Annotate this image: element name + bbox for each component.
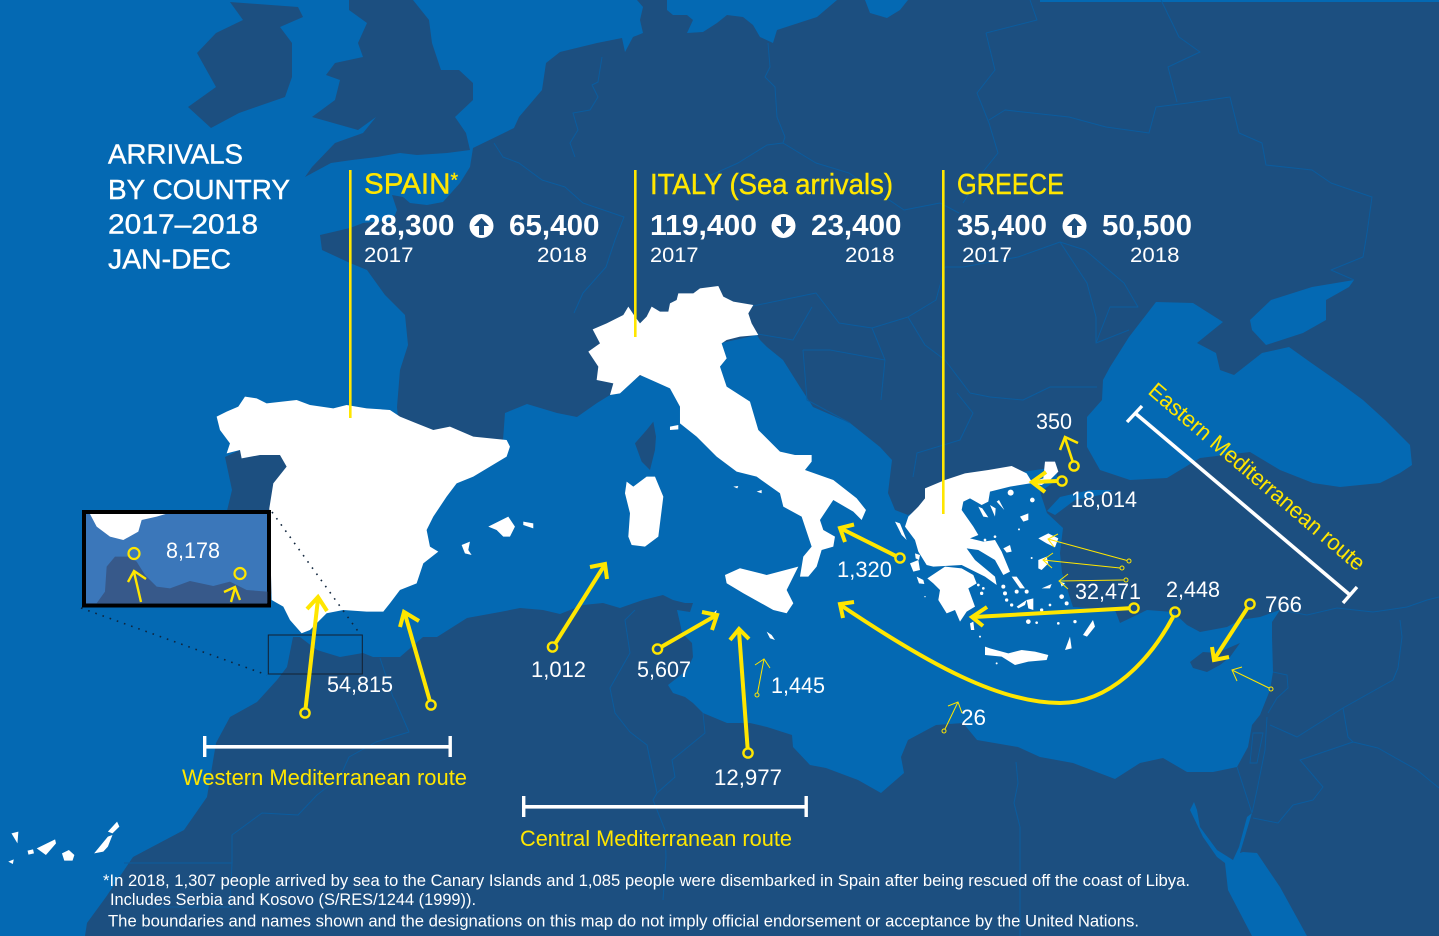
arrow: 32,471 to Greece [972,603,1139,626]
value labels: 54,815 [327,672,393,697]
leader line: Spain [349,170,352,418]
land: Great Britain [305,0,473,177]
highlighted country: Spain [217,397,510,633]
curved arrow: 2,448 to Italy [840,602,1180,703]
central route: arrow from Libya [730,629,753,758]
year: 2018: 2018 [1130,243,1180,267]
dotted connector: inset to frame, bottom [81,608,267,675]
arrow: 1,320 to Italy [840,524,905,563]
land: Cyprus [1190,643,1240,672]
islands: Balearic [462,517,533,555]
route label: eastern: Eastern Mediterranean route [1144,378,1370,576]
sea: Azov [1250,280,1354,345]
value: Spain 2018: 65,400 [509,210,600,242]
value labels: 1,320 [837,557,892,582]
value: Italy 2018: 23,400 [811,210,902,242]
title: arrivals by country: 2017–2018 [108,208,258,240]
value labels: 350 [1036,409,1072,434]
value labels: 12,977 [714,765,782,790]
route label: western: Western Mediterranean route [182,765,467,790]
highlighted country: Greece [895,462,1095,665]
heading: Spain: SPAIN [364,169,449,201]
land: Corsica [635,422,656,470]
zoom frame: Strait of Gibraltar [268,635,362,674]
arrow: 350 to Bulgaria [1060,437,1079,471]
value: Spain 2017: 28,300 [364,210,454,242]
bracket: eastern route [1127,406,1357,603]
sea: Red Sea [1190,802,1307,936]
highlighted country: Italy [588,286,866,640]
land: Portugal [225,450,295,600]
sea: Marmara [1047,490,1113,515]
value labels: 1,012 [531,657,586,682]
year: 2017: 2017 [962,243,1012,267]
panel: Spain statistics [364,169,600,267]
panel: Italy statistics [650,169,902,267]
islands: Canary Islands [8,822,119,864]
dotted connector: inset to frame, top [272,512,360,634]
inset land: Morocco [97,557,267,603]
arrow: 766 to Cyprus [1212,599,1255,660]
icon: arrow up [1062,214,1086,238]
thin arrow: Lebanon to Cyprus [1232,667,1273,691]
inset arrow: Ceuta [128,548,146,602]
inset value: 8,178 [166,538,220,563]
value: Italy 2017: 119,400 [650,210,757,242]
heading: Italy: ITALY (Sea arrivals) [650,169,893,201]
panel: Greece statistics [957,169,1192,267]
thin arrow: 1,445 [755,659,770,697]
value labels: 766 [1265,592,1302,617]
route label: central: Central Mediterranean route [520,826,792,851]
thin arrow: 26 [942,702,962,733]
title: arrivals by country [108,138,290,274]
thin arrows: Aegean islands [1043,534,1131,589]
leader line: Italy [634,170,637,337]
central route: arrow from Algeria [548,564,607,652]
inset arrow: Melilla [224,568,246,602]
footnote: Includes Serbia and Kosovo (S/RES/1244 (1999)). [110,891,476,909]
bracket: central route [522,796,808,817]
sea: Black Sea [1087,302,1412,487]
title: arrivals by country: BY COUNTRY [108,174,290,205]
inset: Ceuta and Melilla [84,512,269,606]
bracket: western route [203,736,452,757]
central route: arrow from Tunisia [653,612,717,654]
western route: second arrow to Spain [400,612,436,710]
footnote [103,872,1190,931]
title: arrivals by country: JAN-DEC [108,244,231,274]
year: 2017: 2017 [650,243,698,267]
leader line: Greece [942,170,945,514]
icon: arrow down [772,214,796,238]
western route: arrow to Spain [300,597,327,718]
inset land: Spain [90,514,166,540]
value labels [327,409,1302,790]
value: Greece 2018: 50,500 [1102,210,1192,242]
year: 2017: 2017 [364,243,414,267]
value labels: 1,445 [771,673,825,698]
icon: arrow up [470,214,494,238]
year: 2018: 2018 [845,243,895,267]
arrow: 18,014 to Greece [1032,472,1067,492]
footnote: The boundaries and names shown and the designations on this map do not imply official endorsement or acceptance by the United Nations. [108,913,1139,931]
value labels: 18,014 [1071,487,1137,512]
land: Ireland [188,2,303,128]
value labels: 5,607 [637,657,691,682]
title: arrivals by country: ARRIVALS [108,138,243,170]
year: 2018: 2018 [537,243,587,267]
heading: Spain: * [450,171,459,192]
value labels: 26 [961,705,986,730]
value labels: 32,471 [1075,579,1141,604]
value: Greece 2017: 35,400 [957,210,1047,242]
heading: Greece: GREECE [957,169,1064,201]
footnote: *In 2018, 1,307 people arrived by sea to the Canary Islands and 1,085 people were disembarked in Spain after being rescued off the coast of Libya. [103,872,1190,890]
value labels: 2,448 [1166,577,1220,602]
